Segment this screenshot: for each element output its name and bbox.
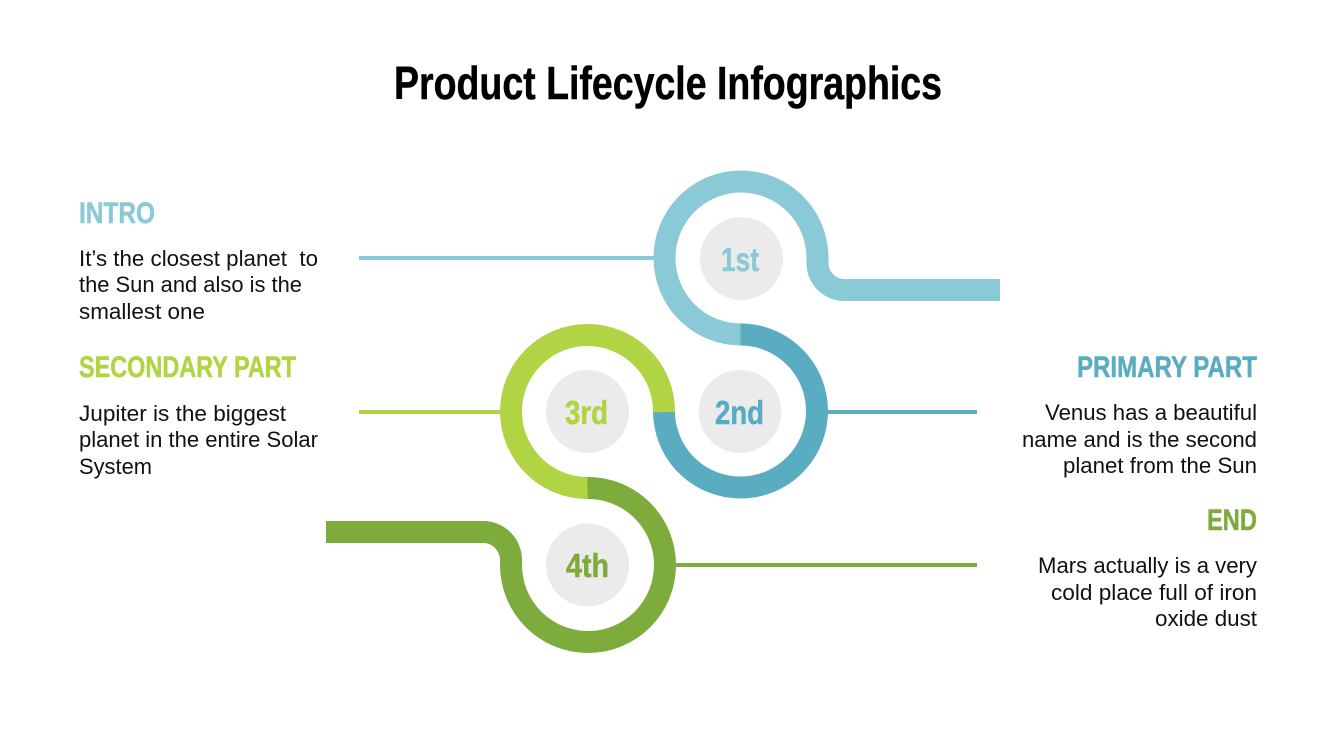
text block: primary part description: name and is the second: [1022, 427, 1257, 452]
connector line: primary part: [827, 410, 977, 414]
connector line: end: [674, 563, 977, 567]
text block: end description: oxide dust: [1155, 606, 1257, 631]
text block: intro description: It’s the closest planet to: [79, 246, 318, 271]
text block: secondary part description: planet in the entire Solar: [79, 427, 318, 452]
lifecycle curve: segment 2: [664, 334, 817, 488]
badge: 1st: [700, 217, 783, 300]
badge: 3rd: 3rd: [565, 394, 608, 431]
lifecycle curve: segment 1: [664, 182, 1000, 334]
lifecycle curve: segment 4: [326, 488, 665, 642]
text block: secondary part description: Jupiter is the biggest: [79, 401, 286, 426]
text block: secondary part description: System: [79, 454, 152, 479]
panel: secondary part text: [79, 351, 318, 479]
connector line: intro: [359, 256, 654, 260]
text block: primary part description: Venus has a beautiful: [1045, 400, 1257, 425]
text block: intro description: smallest one: [79, 299, 205, 324]
text block: end description: cold place full of iron: [1051, 580, 1257, 605]
title: Product Lifecycle Infographics: [394, 57, 942, 109]
panel: end text: [1038, 504, 1257, 631]
heading: intro: INTRO: [79, 197, 155, 230]
connector line: secondary part: [359, 410, 501, 414]
badge: 2nd: 2nd: [715, 394, 764, 431]
panel: primary part text: [1022, 351, 1257, 478]
badge: 2nd: [698, 370, 782, 453]
text block: intro description: [79, 246, 318, 324]
text block: intro description: the Sun and also is the: [79, 272, 302, 297]
text block: end description: [1038, 553, 1257, 631]
heading: primary part: PRIMARY PART: [1077, 351, 1257, 384]
panel: intro text: [79, 197, 318, 324]
badge: 4th: 4th: [566, 547, 609, 584]
badge: 3rd: [546, 370, 629, 453]
heading: secondary part: SECONDARY PART: [79, 351, 296, 384]
badge: 1st: 1st: [721, 241, 759, 278]
text block: primary part description: planet from the Sun: [1063, 453, 1257, 478]
lifecycle curve: segment 3: [511, 335, 664, 488]
text block: end description: Mars actually is a very: [1038, 553, 1257, 578]
badge: 4th: [546, 524, 629, 606]
text block: secondary part description: [79, 401, 318, 479]
text block: primary part description: [1022, 400, 1257, 478]
heading: end: END: [1207, 504, 1257, 537]
